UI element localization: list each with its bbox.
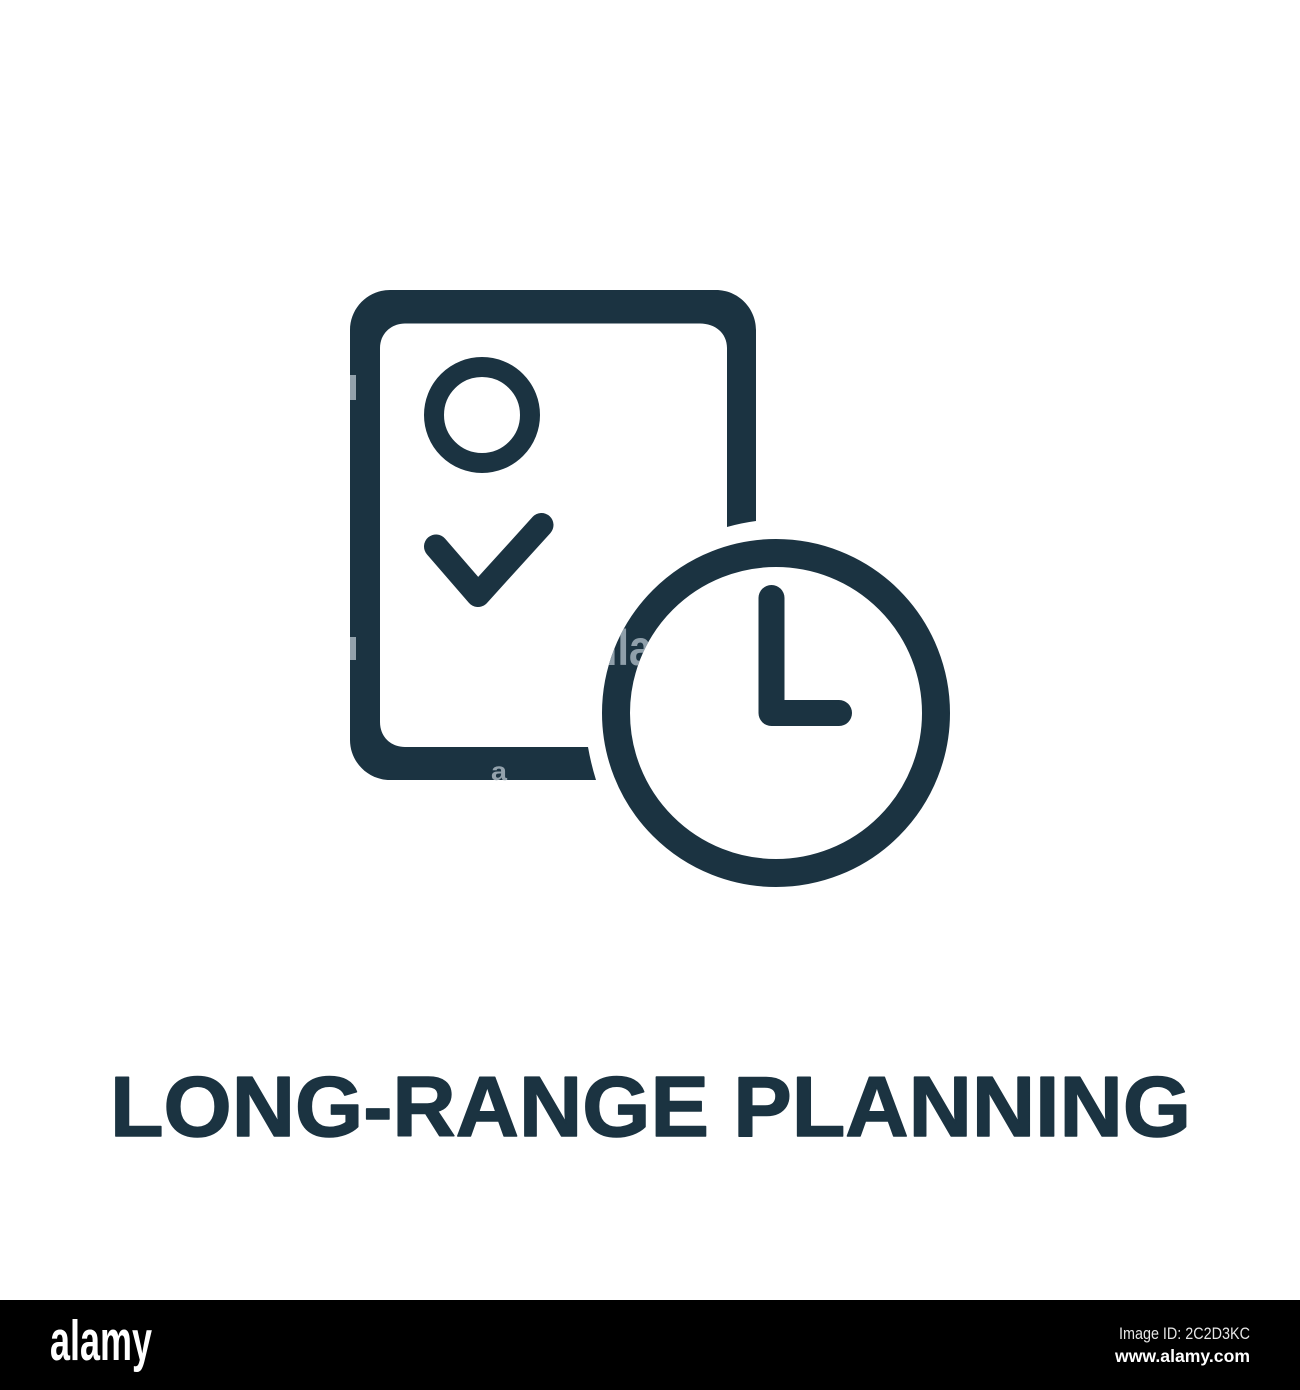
watermark fragment: document left edge upper [350,375,356,400]
title: LONG-RANGE PLANNING [110,1060,1191,1155]
footer logo: alamy [50,1309,152,1373]
watermark fragment: clock edge: ila [606,620,653,676]
icon: check mark [436,525,542,595]
image id: Image ID: 2C2D3KC [1119,1324,1250,1343]
website address: www.alamy.com [1114,1346,1250,1366]
watermark fragment: document bottom: a [491,756,508,786]
icon: clock face [616,553,936,873]
infographic canvas [0,290,1300,1390]
footer band [0,1300,1300,1390]
icon: document outline [350,290,756,780]
icon: checklist circle [434,367,530,463]
watermark fragment: document left edge lower [350,637,356,660]
icon: clock hands [772,598,839,713]
icon: long-range planning document and clock [350,290,936,873]
